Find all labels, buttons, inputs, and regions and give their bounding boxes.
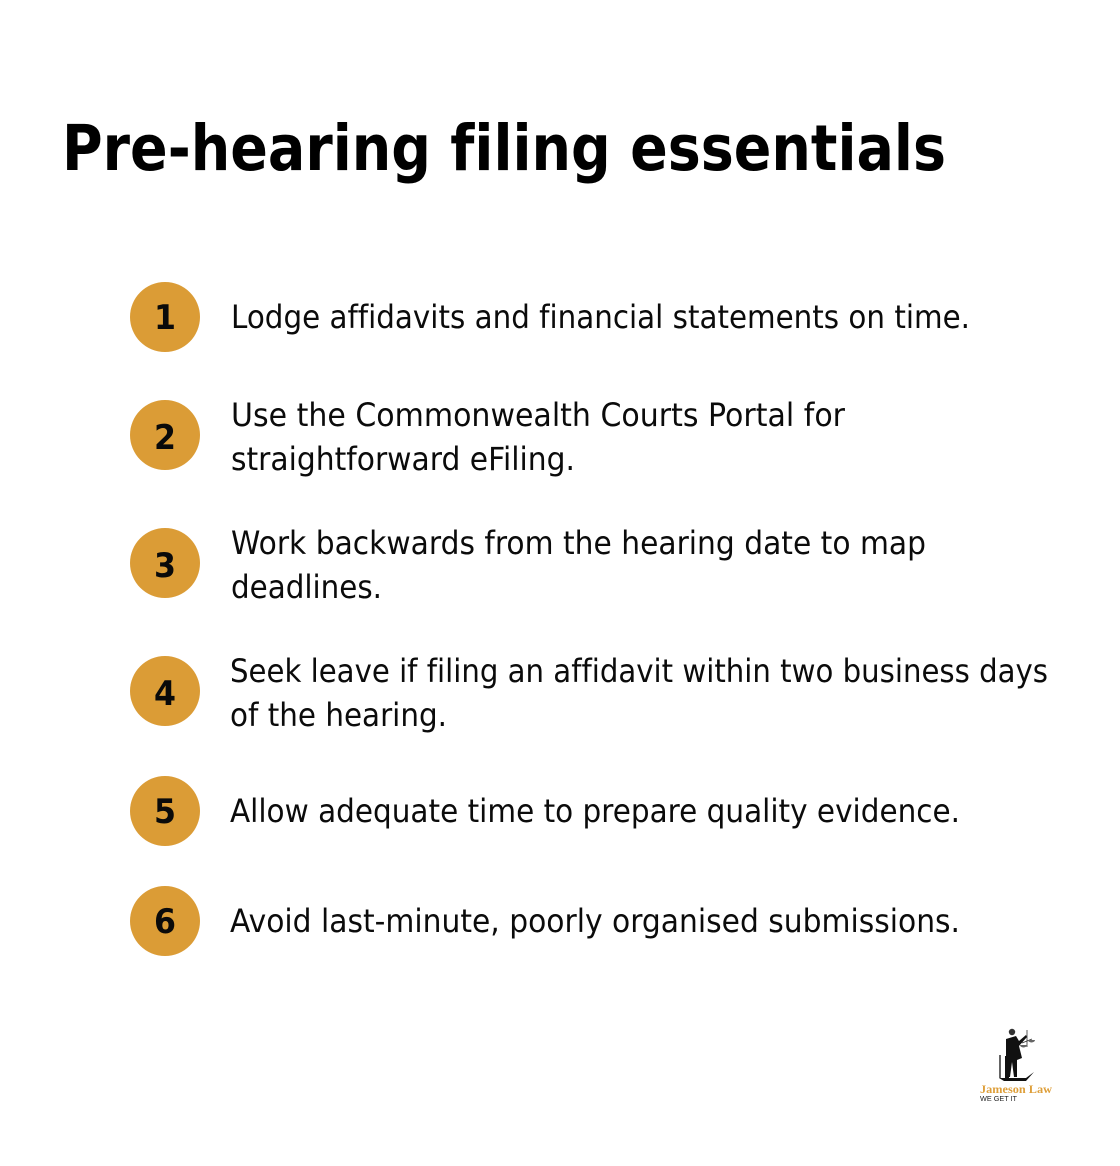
item 4 text xyxy=(230,652,1048,734)
item 6 text: Avoid last-minute, poorly organised submissions. xyxy=(230,902,960,940)
list item 2 xyxy=(130,396,846,478)
icon: lady justice with scales xyxy=(999,1029,1035,1081)
item 2 text xyxy=(231,396,846,478)
logo tagline: WE GET IT xyxy=(980,1096,1018,1103)
item 3 text: deadlines. xyxy=(231,568,382,606)
number badge 5: 5 xyxy=(154,792,176,832)
number badge 6 xyxy=(130,886,200,956)
item 3 text: Work backwards from the hearing date to map xyxy=(231,524,926,562)
number badge 2: 2 xyxy=(154,418,176,458)
list item 4 xyxy=(130,652,1048,734)
number badge 2 xyxy=(130,400,200,470)
number badge 1 xyxy=(130,282,200,352)
item 5 text: Allow adequate time to prepare quality evidence. xyxy=(230,792,960,830)
title: Pre-hearing filing essentials xyxy=(62,112,946,185)
number badge 6: 6 xyxy=(154,902,176,942)
item 2 text: straightforward eFiling. xyxy=(231,440,575,478)
logo wordmark: Jameson Law xyxy=(980,1084,1053,1096)
list item 5 xyxy=(130,776,960,846)
item 4 text: Seek leave if filing an affidavit within two business days xyxy=(230,652,1048,690)
item 1 text: Lodge affidavits and financial statements on time. xyxy=(231,298,970,336)
number badge 4 xyxy=(130,656,200,726)
logo: Jameson Law xyxy=(980,1029,1053,1103)
item 2 text: Use the Commonwealth Courts Portal for xyxy=(231,396,846,434)
item 4 text: of the hearing. xyxy=(230,696,447,734)
number badge 1: 1 xyxy=(154,298,176,338)
number badge 3: 3 xyxy=(154,546,176,586)
list item 3 xyxy=(130,524,926,606)
item 3 text xyxy=(231,524,926,606)
list item 1 xyxy=(130,282,970,352)
list item 6 xyxy=(130,886,960,956)
number badge 5 xyxy=(130,776,200,846)
number badge 3 xyxy=(130,528,200,598)
number badge 4: 4 xyxy=(154,674,176,714)
